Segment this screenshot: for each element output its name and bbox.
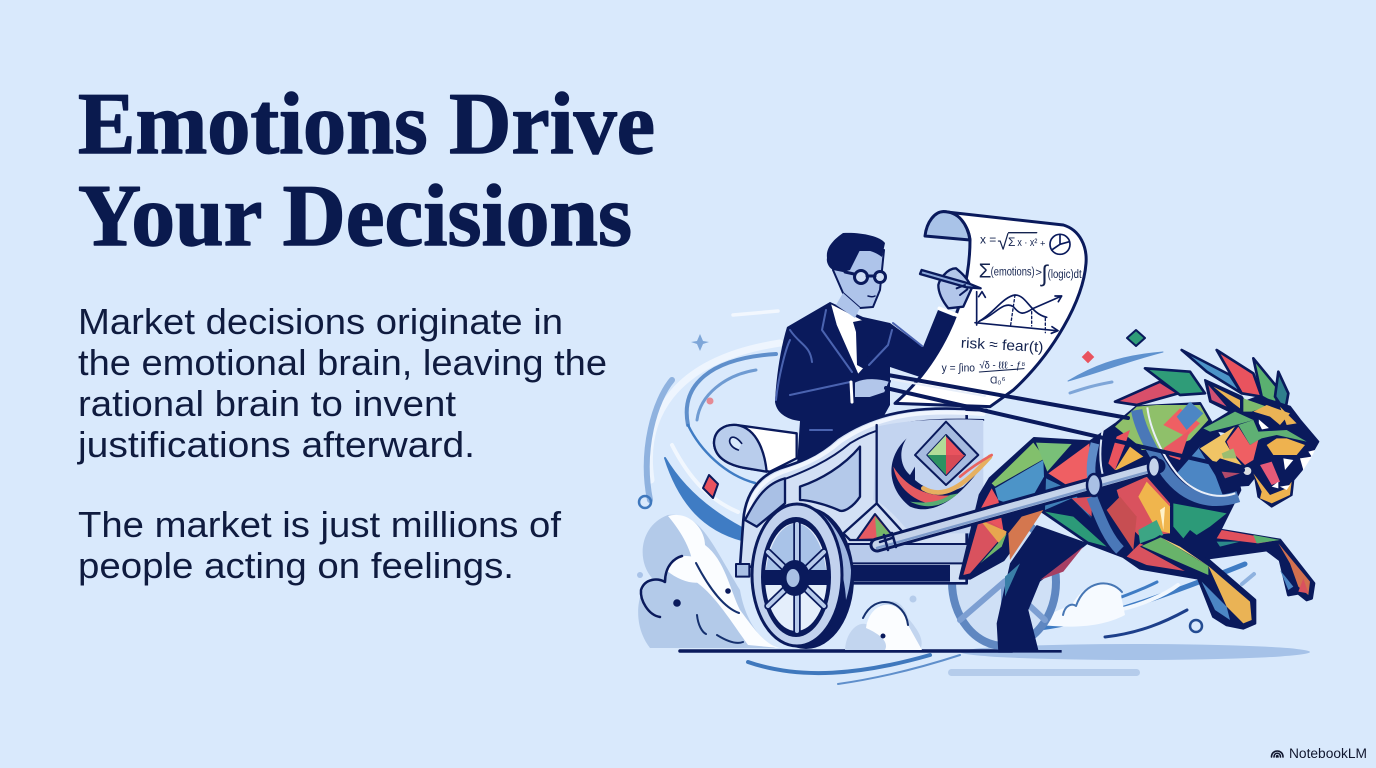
scroll with equations: (emotions) bbox=[991, 264, 1035, 278]
scroll with equations: y = ∫ino bbox=[942, 362, 975, 374]
eye bbox=[1258, 418, 1270, 430]
NotebookLM logo: NotebookLM bbox=[1289, 746, 1367, 761]
head bbox=[833, 250, 884, 308]
chariot crescent swirl bbox=[891, 438, 977, 509]
harness straps bbox=[1091, 407, 1238, 550]
tongue bbox=[1260, 462, 1280, 485]
lion head bbox=[1200, 380, 1318, 507]
diamond emblem bbox=[915, 422, 978, 485]
scroll with equations: √ bbox=[997, 231, 1009, 254]
front leg bbox=[1140, 535, 1255, 628]
text block: market feelings: The market is just millions of bbox=[78, 504, 562, 545]
scroll with equations: Ɑ₀⁶ bbox=[990, 375, 1006, 386]
hand on reins bbox=[854, 378, 890, 398]
body silhouette bbox=[960, 403, 1314, 628]
text block: market feelings bbox=[78, 504, 562, 586]
man in suit bbox=[775, 233, 958, 465]
text block: emotional brain: the emotional brain, leaving the bbox=[78, 342, 607, 383]
scroll with equations: x = bbox=[980, 232, 996, 246]
title bbox=[78, 76, 655, 265]
line chart on scroll bbox=[975, 292, 1062, 333]
pie icon on scroll bbox=[1050, 234, 1070, 254]
triangle emblem bbox=[857, 514, 893, 540]
teeth bbox=[1272, 450, 1315, 490]
rear dark leg bbox=[997, 525, 1088, 653]
drawbar bbox=[877, 457, 1160, 550]
text block: emotional brain: justifications afterward. bbox=[77, 424, 475, 465]
reins bbox=[886, 375, 1243, 470]
title: Emotions Drive bbox=[78, 76, 655, 173]
back chariot wheel bbox=[952, 518, 1056, 646]
mane spikes bbox=[1115, 350, 1288, 412]
title: Your Decisions bbox=[78, 168, 632, 265]
scroll with equations: Σ bbox=[1008, 235, 1015, 249]
illustration: man in chariot pulled by emotional lion bbox=[637, 212, 1318, 684]
torso colored facets bbox=[1115, 405, 1208, 450]
rear front leg bbox=[1217, 530, 1278, 543]
glasses bbox=[845, 270, 886, 284]
axle platform bbox=[848, 544, 970, 563]
text block: emotional brain: rational brain to invent bbox=[78, 383, 456, 424]
text block: emotional brain bbox=[77, 301, 607, 465]
hand with pen bbox=[920, 268, 981, 315]
scroll with equations: ∫ bbox=[1039, 260, 1049, 286]
chariot body bbox=[714, 409, 992, 583]
lion bbox=[960, 350, 1314, 653]
lower jaw bbox=[1253, 473, 1292, 503]
motion swirls bbox=[647, 311, 1254, 684]
scroll with equations: (logic)dt bbox=[1048, 267, 1082, 281]
ground shadow bbox=[680, 644, 1310, 676]
dust clouds bbox=[638, 515, 1125, 650]
text block: market feelings: people acting on feelings. bbox=[78, 545, 514, 586]
rolled scroll on chariot bbox=[714, 425, 797, 472]
scroll with equations: risk ≈ fear(t) bbox=[960, 336, 1044, 356]
icon: NotebookLM mark bbox=[1272, 751, 1283, 757]
scroll with equations: Σ bbox=[979, 259, 991, 282]
front chariot wheel bbox=[752, 504, 854, 649]
scroll with equations: + bbox=[1040, 239, 1045, 249]
scroll with equations: > bbox=[1035, 267, 1042, 279]
text block: emotional brain: Market decisions originate in bbox=[78, 301, 563, 342]
scroll with equations bbox=[895, 212, 1086, 407]
scroll with equations: √δ - ℓℓℓ - ƒ⁸ bbox=[979, 359, 1025, 371]
scroll with equations: x · x² bbox=[1017, 237, 1038, 249]
sparkle and confetti icons bbox=[637, 330, 1202, 632]
